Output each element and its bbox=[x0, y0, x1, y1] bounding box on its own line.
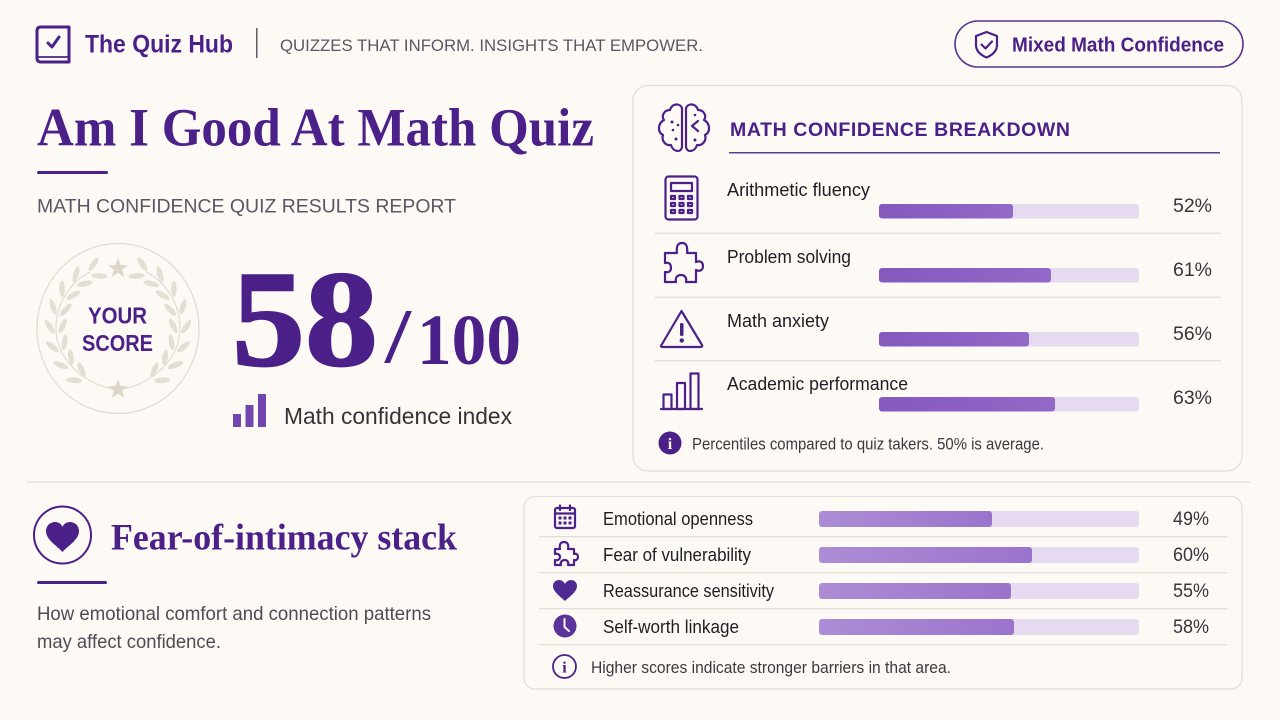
bar bbox=[819, 511, 1139, 527]
brand name: The Quiz Hub bbox=[85, 30, 233, 58]
bar bbox=[879, 397, 1139, 412]
badge: mixed math confidence bbox=[955, 21, 1243, 67]
icon: puzzle bbox=[555, 542, 578, 565]
bar bbox=[879, 268, 1139, 282]
percentile note bbox=[658, 432, 1044, 454]
value: 49% bbox=[1173, 509, 1209, 530]
row: fear of vulnerability bbox=[555, 542, 1209, 566]
icon: heart in circle bbox=[34, 506, 91, 564]
confidence index label: Math confidence index bbox=[284, 403, 512, 429]
icon: puzzle bbox=[665, 243, 703, 282]
label: Emotional openness bbox=[603, 508, 753, 529]
label: Fear of vulnerability bbox=[603, 544, 752, 565]
bottom star bbox=[108, 379, 128, 398]
icon: brain bbox=[659, 104, 709, 151]
icon: info outline bbox=[553, 655, 576, 678]
row: emotional openness bbox=[555, 506, 1209, 530]
value: 60% bbox=[1173, 545, 1209, 566]
bar bbox=[879, 332, 1139, 346]
icon: info filled bbox=[658, 432, 682, 454]
panel heading: MATH CONFIDENCE BREAKDOWN bbox=[730, 119, 1070, 141]
icon: calculator bbox=[666, 176, 698, 220]
row: math anxiety bbox=[661, 310, 1212, 347]
icon: warning bbox=[661, 311, 702, 347]
badge label: Mixed Math Confidence bbox=[1012, 34, 1224, 56]
score value bbox=[232, 243, 521, 395]
brand separator bbox=[256, 28, 258, 58]
row: academic performance bbox=[661, 373, 1212, 412]
row: reassurance sensitivity bbox=[553, 580, 1209, 602]
section heading: Fear-of-intimacy stack bbox=[111, 518, 457, 558]
value: 55% bbox=[1173, 581, 1209, 602]
panel: math confidence breakdown bbox=[633, 86, 1242, 471]
header brand bbox=[37, 27, 703, 62]
label: Math anxiety bbox=[727, 310, 830, 331]
title underline bbox=[37, 171, 108, 174]
icon: shield check bbox=[976, 32, 997, 58]
icon: info filled: i bbox=[668, 436, 673, 453]
label: Problem solving bbox=[727, 246, 851, 267]
icon: clock bbox=[554, 614, 576, 638]
subtitle: MATH CONFIDENCE QUIZ RESULTS REPORT bbox=[37, 196, 456, 218]
score medallion bbox=[37, 244, 199, 414]
row: arithmetic fluency bbox=[666, 176, 1212, 220]
value: 58% bbox=[1173, 617, 1209, 638]
score value: / bbox=[385, 295, 412, 379]
bar bbox=[819, 547, 1139, 563]
value: 56% bbox=[1173, 324, 1212, 345]
laurel wreath bbox=[43, 255, 193, 390]
bar bbox=[819, 619, 1139, 635]
icon: bar chart bbox=[661, 374, 702, 409]
heading rule bbox=[729, 152, 1220, 154]
label: Self-worth linkage bbox=[603, 616, 739, 637]
label: Reassurance sensitivity bbox=[603, 580, 775, 601]
icon: calendar bbox=[555, 506, 575, 528]
value: 63% bbox=[1173, 388, 1212, 409]
your score label: YOUR bbox=[88, 302, 147, 328]
top star bbox=[108, 258, 128, 277]
panel: barriers bbox=[524, 496, 1242, 689]
label: Academic performance bbox=[727, 373, 908, 394]
heading underline bbox=[37, 581, 107, 584]
section description: How emotional comfort and connection patterns bbox=[37, 603, 431, 625]
section description bbox=[37, 603, 431, 653]
your score label bbox=[82, 302, 153, 356]
icon: quiz book bbox=[37, 27, 69, 62]
section: fear-of-intimacy intro bbox=[34, 506, 457, 653]
label: Arithmetic fluency bbox=[727, 179, 871, 200]
barrier note: Higher scores indicate stronger barriers in that area. bbox=[591, 658, 951, 677]
title: Am I Good At Math Quiz bbox=[37, 98, 594, 158]
bar bbox=[879, 204, 1139, 218]
score value: 100 bbox=[417, 300, 521, 380]
row: self-worth linkage bbox=[554, 614, 1209, 638]
icon: info outline: i bbox=[562, 660, 567, 676]
icon: heart bbox=[553, 580, 577, 601]
value: 61% bbox=[1173, 260, 1212, 281]
icon: bars bbox=[233, 394, 266, 427]
row: problem solving bbox=[665, 243, 1212, 282]
bar bbox=[819, 583, 1139, 599]
your score label: SCORE bbox=[82, 330, 153, 356]
score value: 58 bbox=[232, 243, 378, 395]
value: 52% bbox=[1173, 196, 1212, 217]
confidence index label bbox=[233, 394, 512, 429]
percentile note: Percentiles compared to quiz takers. 50% is average. bbox=[692, 434, 1044, 454]
tagline: QUIZZES THAT INFORM. INSIGHTS THAT EMPOWER. bbox=[280, 37, 703, 55]
section description: may affect confidence. bbox=[37, 631, 221, 653]
